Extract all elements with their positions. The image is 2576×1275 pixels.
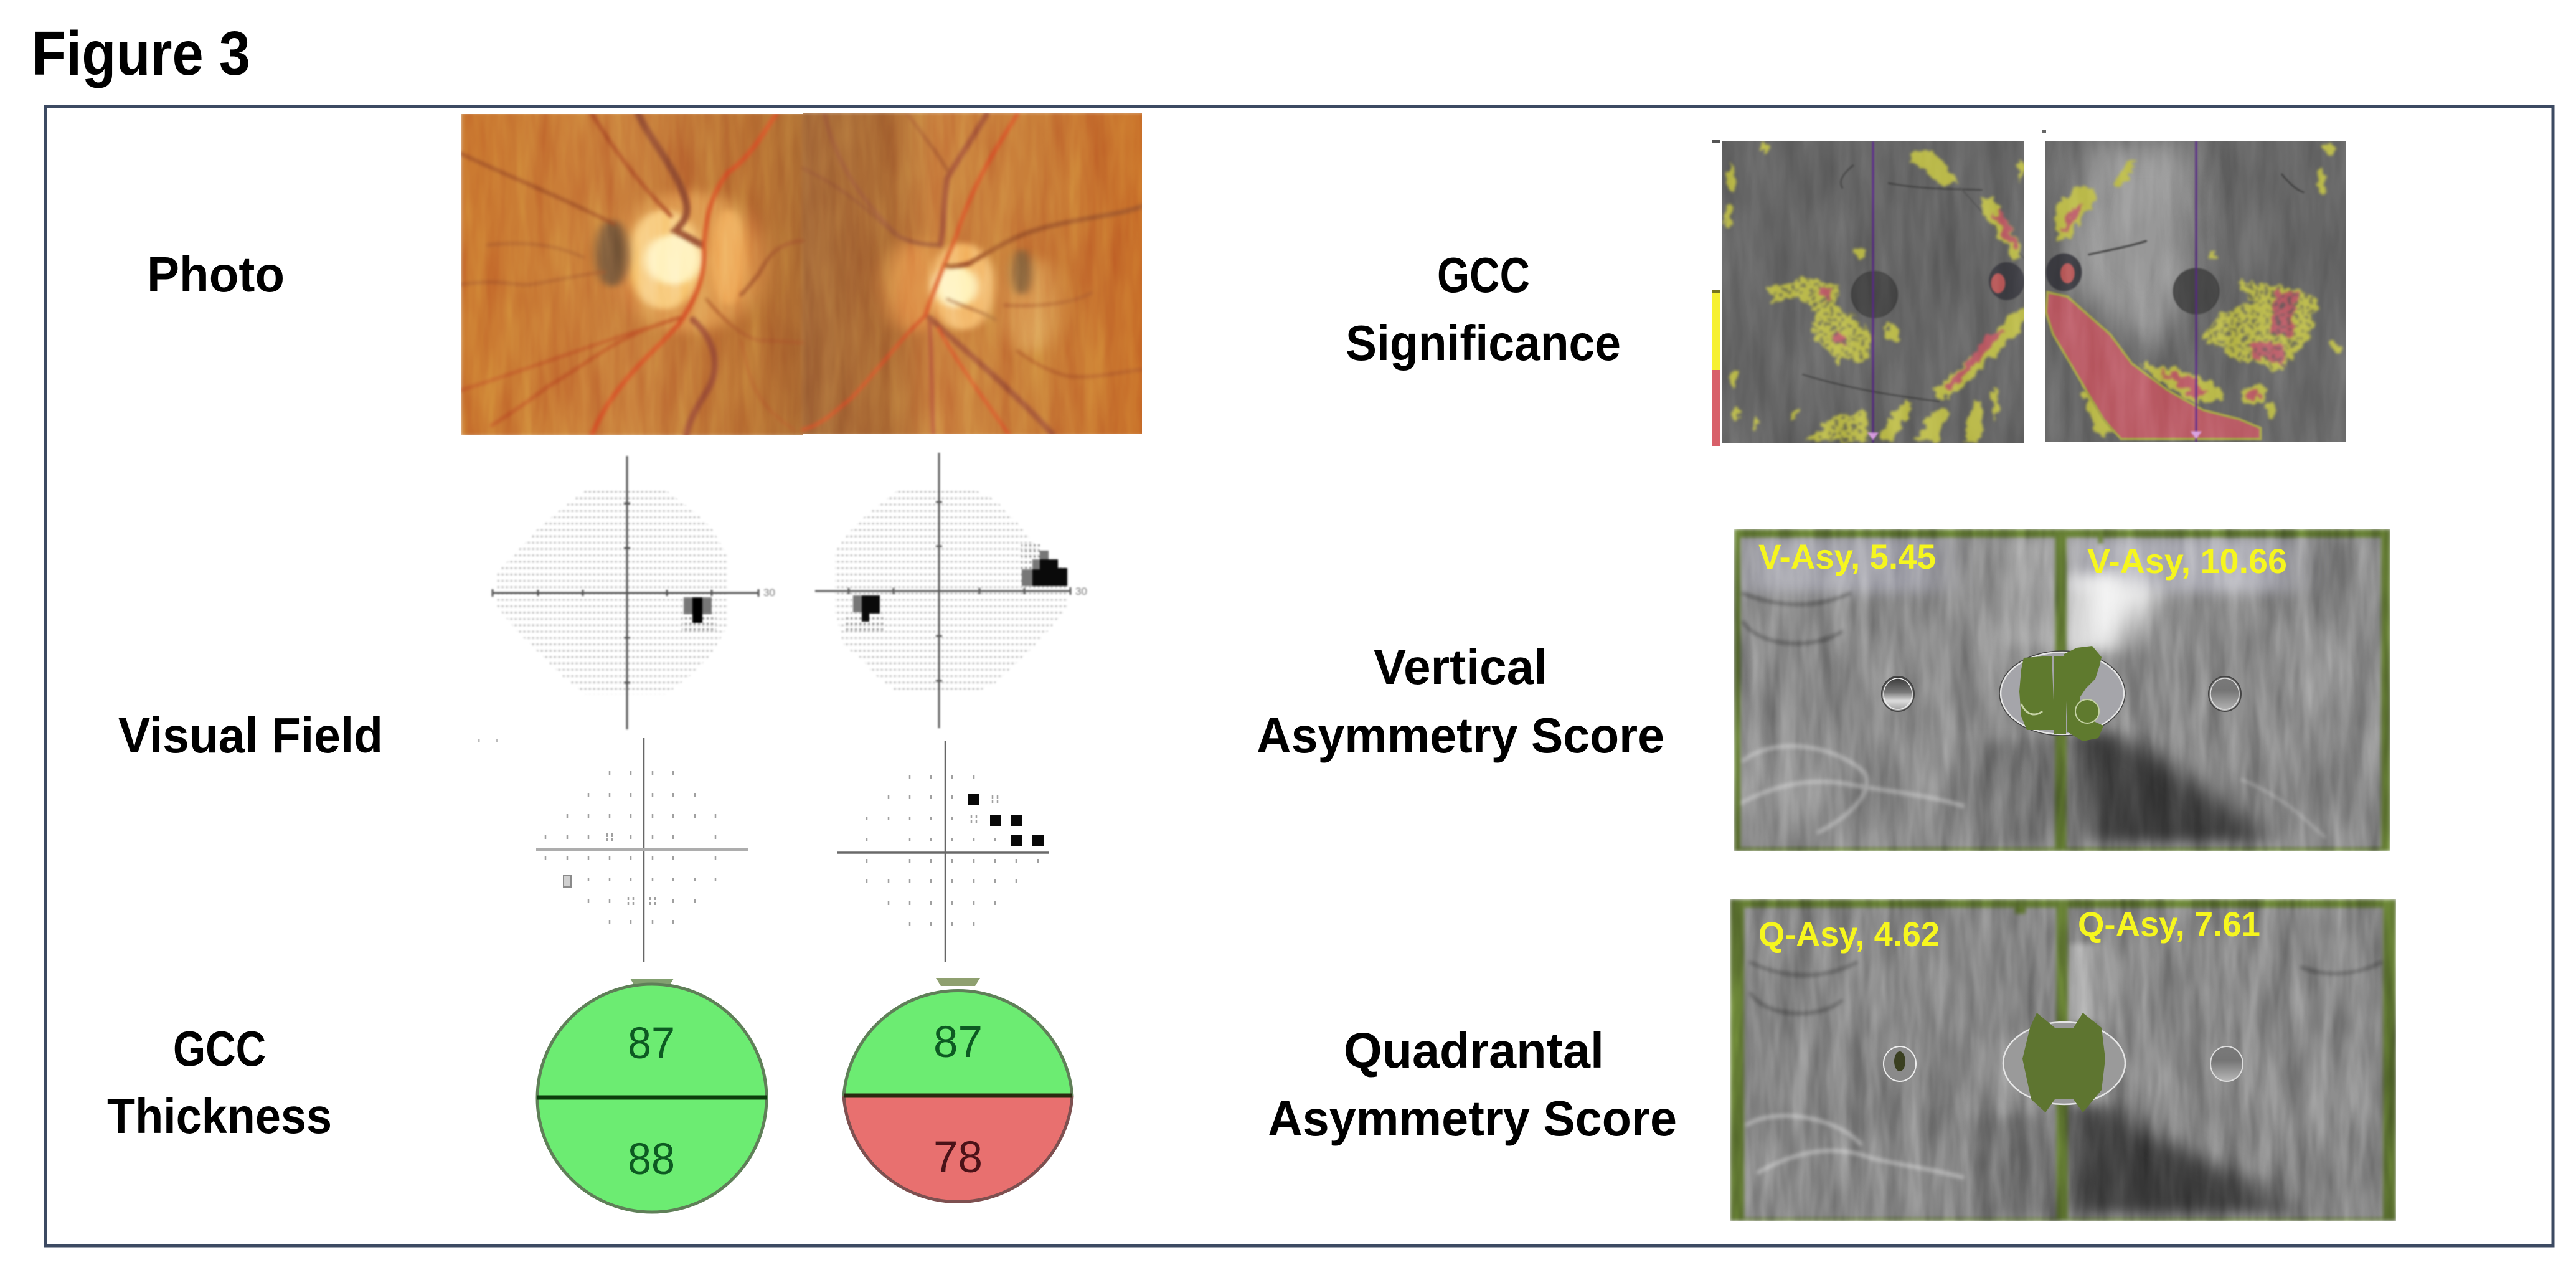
chart: GCC thickness, right eye: 87 bbox=[933, 1018, 983, 1067]
left eye: halo bbox=[614, 191, 763, 332]
label: GCC Thickness bbox=[107, 1021, 332, 1144]
optic disc mask bbox=[2003, 1013, 2125, 1112]
label: Vertical Asymmetry Score: Vertical bbox=[1374, 639, 1547, 694]
label: Quadrantal Asymmetry Score bbox=[1268, 1023, 1677, 1146]
annotation: Q-Asy right: Q-Asy, 7.61 bbox=[2078, 904, 2260, 944]
fovea rings bbox=[1884, 1046, 2243, 1081]
label: Visual Field: Visual Field bbox=[118, 708, 383, 763]
chart: GCC thickness, left eye: 87 bbox=[628, 1019, 675, 1068]
legend: significance colour bar bbox=[1712, 130, 2046, 446]
chart: GCC thickness, right eye: 78 bbox=[933, 1133, 983, 1182]
chart: visual field grayscale, left eye bbox=[493, 456, 775, 729]
right eye: vessels bbox=[941, 114, 986, 245]
label: GCC Significance: Significance bbox=[1346, 315, 1621, 371]
chart: pattern deviation, right eye bbox=[837, 741, 1049, 962]
optic disc mask bbox=[1999, 646, 2125, 741]
chart: GCC thickness, left eye: 88 bbox=[628, 1135, 675, 1184]
title: Figure 3 bbox=[32, 19, 250, 88]
chart: visual field grayscale, left eye: 30 bbox=[763, 587, 775, 599]
map: GCC significance, right eye bbox=[2045, 141, 2346, 442]
annotation: V-Asy left: V-Asy, 5.45 bbox=[1758, 537, 1936, 576]
right eye: halo bbox=[886, 241, 947, 332]
annotation: V-Asy right: V-Asy, 10.66 bbox=[2087, 541, 2287, 581]
label: Photo: Photo bbox=[147, 247, 285, 302]
label: Vertical Asymmetry Score bbox=[1257, 639, 1664, 763]
annotation: Q-Asy left: Q-Asy, 4.62 bbox=[1758, 914, 1940, 954]
label: GCC Thickness: Thickness bbox=[107, 1088, 332, 1144]
label: GCC Significance: GCC bbox=[1437, 247, 1530, 303]
chart: GCC thickness, right eye bbox=[844, 978, 1072, 1202]
label: Quadrantal Asymmetry Score: Quadrantal bbox=[1344, 1023, 1604, 1078]
panel: fundus photographs bbox=[461, 112, 1149, 436]
chart: visual field grayscale, right eye bbox=[815, 453, 1087, 728]
label: Quadrantal Asymmetry Score: Asymmetry Score bbox=[1268, 1091, 1677, 1146]
label: GCC Significance bbox=[1346, 247, 1621, 371]
fovea rings bbox=[1882, 676, 2241, 711]
label: GCC Thickness: GCC bbox=[173, 1021, 266, 1076]
label: Vertical Asymmetry Score: Asymmetry Score bbox=[1257, 708, 1664, 763]
left eye: vessels bbox=[638, 114, 702, 245]
chart: GCC thickness, left eye bbox=[537, 979, 767, 1212]
chart: visual field grayscale, right eye: 30 bbox=[1075, 585, 1087, 597]
map: quadrantal asymmetry bbox=[1730, 899, 2396, 1221]
map: GCC significance, left eye bbox=[1722, 141, 2024, 443]
chart: pattern deviation, left eye bbox=[479, 738, 748, 962]
map: vertical asymmetry bbox=[1734, 529, 2390, 851]
